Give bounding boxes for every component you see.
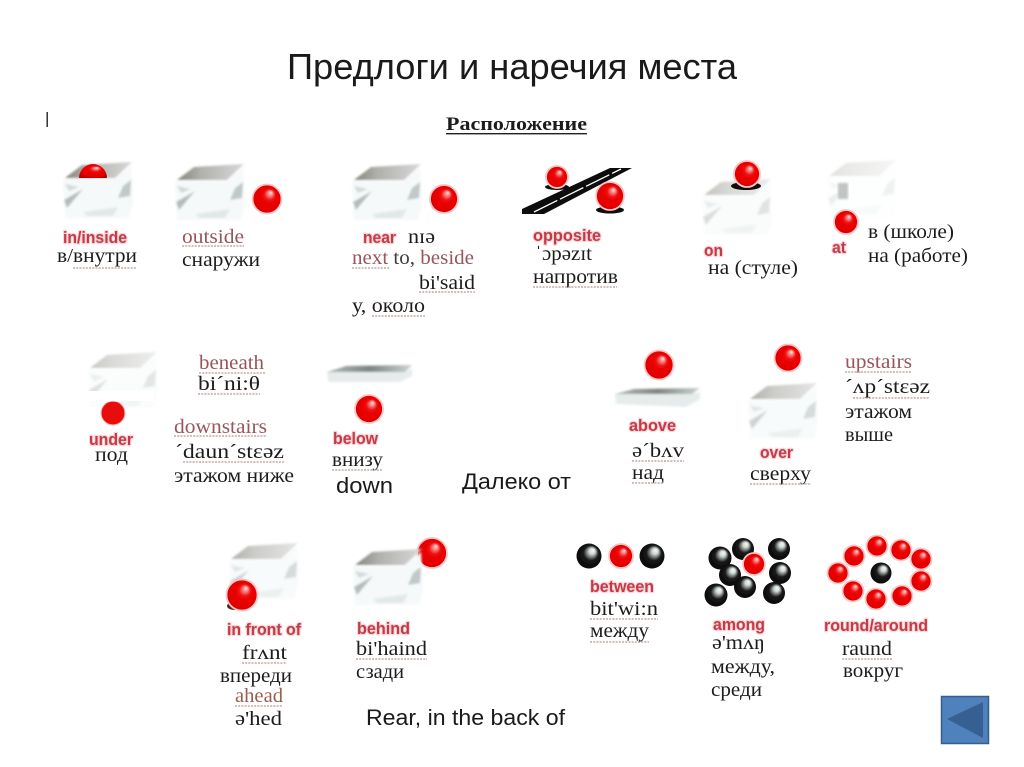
- icon: balls across road: [522, 166, 632, 214]
- panel: at: на (работе): [868, 245, 968, 267]
- panel: above: ə´bʌv: [632, 440, 684, 462]
- panel: on: на (стуле): [708, 257, 798, 279]
- panel: in front of: [220, 543, 301, 730]
- panel: round/around: [824, 536, 932, 682]
- cursor mark: [46, 112, 48, 127]
- panel: over: over: [760, 443, 793, 462]
- panel: in/inside: [57, 162, 137, 268]
- text: far from: Далеко от: [462, 469, 571, 494]
- panel: outside: [175, 164, 282, 271]
- panel: near: [352, 164, 475, 317]
- heading: location: Расположение: [446, 114, 587, 135]
- panel: at: [827, 160, 968, 267]
- panel: between: between: [590, 577, 654, 596]
- panel: beneath and downstairs: этажом ниже: [174, 465, 294, 487]
- panel: outside: снаружи: [182, 249, 260, 271]
- panel: in front of: впереди: [220, 665, 292, 687]
- text: down: down: [336, 473, 393, 498]
- icon: ball outside box: [175, 164, 282, 220]
- panel: beneath and downstairs: ´daun´stɛəz: [175, 441, 284, 463]
- panel: under: под: [95, 444, 128, 466]
- icon: ball on box: [702, 161, 772, 235]
- icon: ball under box: [84, 352, 158, 425]
- panel: near: next to, beside: [352, 247, 474, 269]
- panel: in/inside: in/inside: [63, 228, 127, 247]
- panel: on: on: [704, 241, 723, 260]
- icon: ball above plate: [615, 350, 700, 407]
- panel: over: [748, 344, 818, 485]
- panel: below: [327, 365, 412, 471]
- panel: upstairs: этажом: [845, 401, 912, 423]
- panel: outside: outside: [182, 226, 244, 248]
- panel: near: bi'said: [419, 272, 475, 294]
- icon: ball at box: [827, 160, 897, 234]
- panel: near: у, около: [352, 295, 425, 317]
- panel: under: [84, 352, 158, 466]
- panel: between: bit'wi:n: [590, 598, 658, 620]
- icon: red ball among black balls: [704, 538, 791, 606]
- panel: above: [615, 350, 700, 484]
- icon: ball near box: [352, 164, 458, 220]
- panel: above: above: [629, 416, 676, 435]
- panel: among: между,: [711, 656, 775, 678]
- panel: round/around: вокруг: [843, 660, 903, 682]
- panel: beneath and downstairs: [174, 352, 294, 487]
- panel: upstairs: [845, 351, 930, 446]
- panel: at: в (школе): [868, 221, 954, 243]
- panel: upstairs: upstairs: [845, 351, 912, 373]
- panel: opposite: opposite: [533, 226, 601, 245]
- panel: between: между: [590, 620, 649, 642]
- panel: in/inside: в/внутри: [57, 245, 137, 267]
- panel: at: at: [832, 238, 846, 257]
- panel: below: внизу: [332, 449, 383, 471]
- panel: behind: сзади: [356, 661, 404, 683]
- panel: behind: behind: [357, 619, 410, 638]
- title: Предлоги и наречия места: [287, 46, 738, 87]
- panel: upstairs: ´ʌp´stɛəz: [845, 376, 930, 398]
- panel: round/around: raund: [842, 638, 892, 660]
- icon: red ball between black balls: [576, 544, 664, 568]
- panel: among: [704, 538, 791, 701]
- panel: in front of: ahead: [235, 685, 283, 707]
- icon: ball over box: [748, 344, 818, 439]
- panel: near: near: [363, 228, 396, 247]
- panel: above: над: [632, 462, 664, 484]
- panel: among: ə'mʌŋ: [712, 632, 765, 654]
- panel: beneath and downstairs: beneath: [199, 352, 264, 374]
- panel: opposite: напротив: [533, 266, 618, 288]
- panel: opposite: [522, 166, 632, 288]
- icon: red balls around black ball: [828, 536, 932, 610]
- panel: in front of: ə'hed: [235, 708, 282, 730]
- text: rear: Rear, in the back of: [366, 705, 566, 730]
- panel: in front of: in front of: [227, 620, 301, 639]
- panel: behind: bi'haind: [356, 638, 427, 660]
- panel: in front of: frʌnt: [242, 642, 287, 664]
- icon: ball in front of box: [226, 543, 299, 610]
- panel: round/around: round/around: [824, 616, 928, 635]
- panel: beneath and downstairs: bi´ni:θ: [198, 373, 260, 395]
- icon: ball in box: [63, 162, 133, 218]
- panel: among: among: [713, 615, 765, 634]
- panel: behind: [353, 538, 447, 683]
- panel: over: сверху: [750, 463, 811, 485]
- icon: ball behind box: [353, 538, 447, 605]
- panel: between: [576, 544, 664, 642]
- panel: under: under: [89, 430, 133, 449]
- panel: near: nɪə: [408, 226, 435, 248]
- panel: opposite: ˈɔpəzɪt: [535, 243, 592, 265]
- panel: beneath and downstairs: downstairs: [174, 416, 267, 438]
- back button: [942, 696, 988, 744]
- panel: on: [702, 161, 798, 279]
- panel: among: среди: [711, 679, 762, 701]
- icon: ball below plate: [327, 365, 412, 423]
- panel: below: below: [333, 429, 379, 448]
- panel: upstairs: выше: [845, 424, 893, 446]
